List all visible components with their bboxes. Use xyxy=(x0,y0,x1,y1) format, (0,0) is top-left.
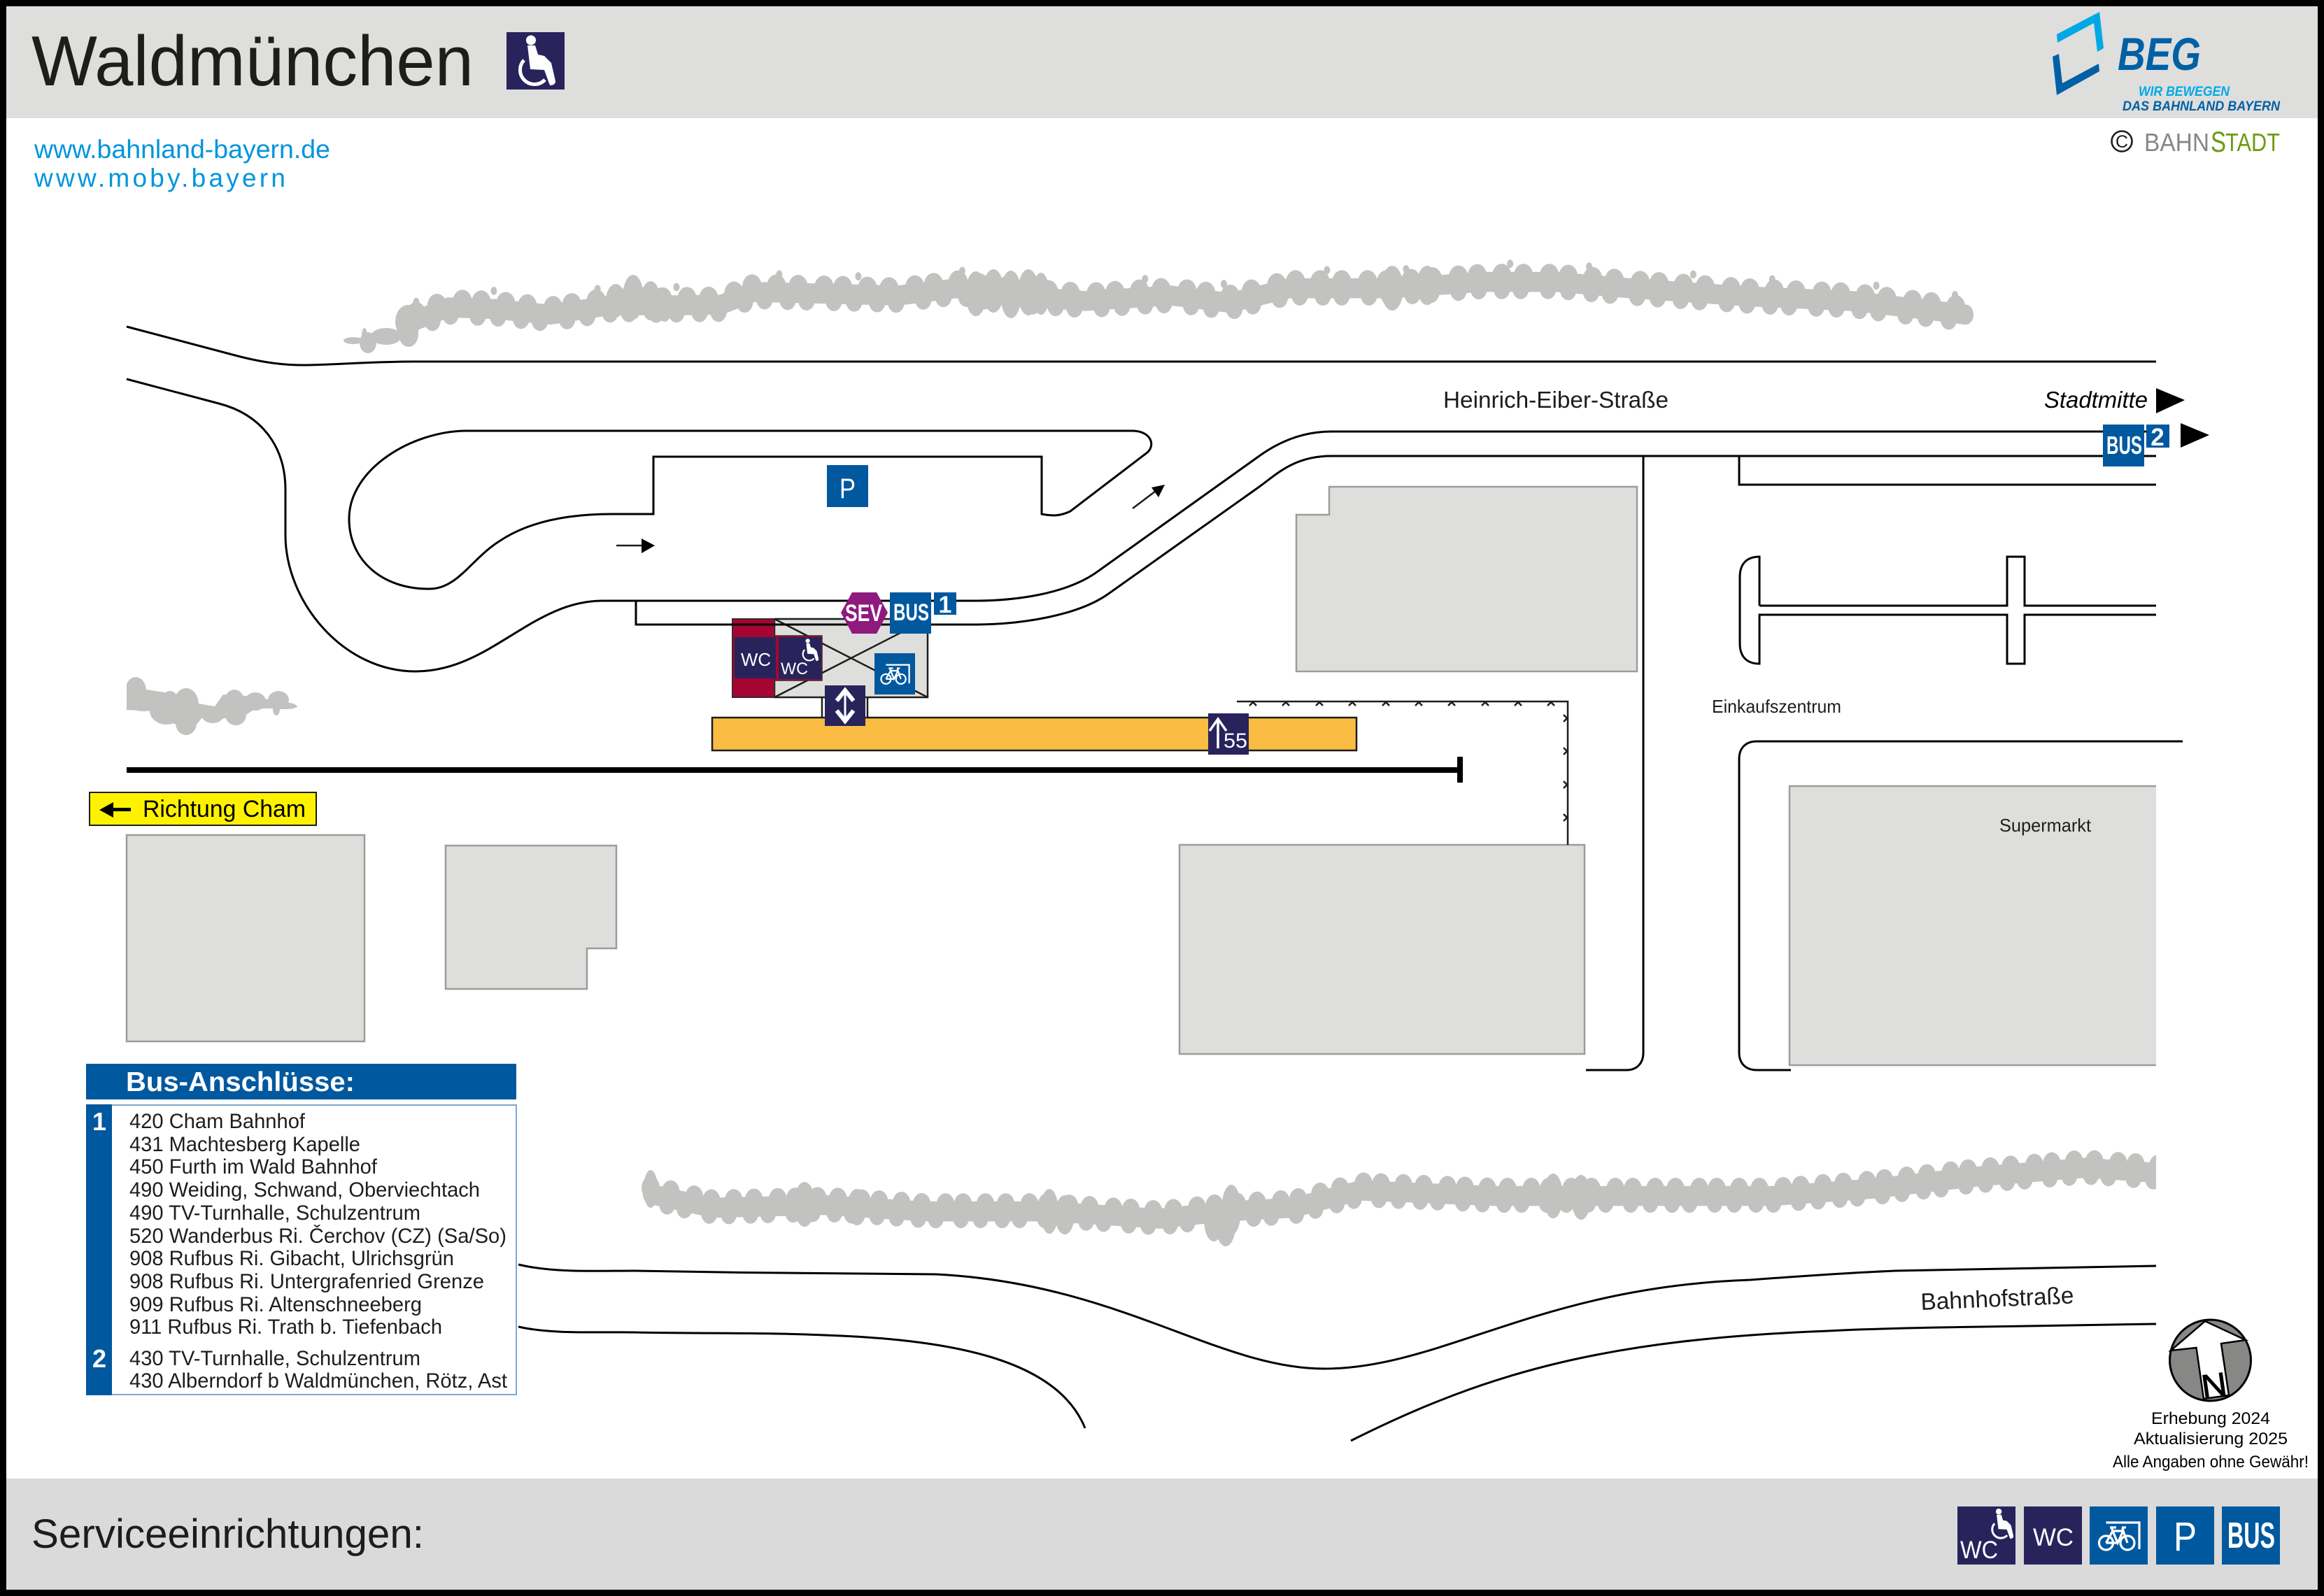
icon: parking: P xyxy=(839,473,856,504)
web links: www.moby.bayern xyxy=(34,164,285,192)
platform xyxy=(712,718,1356,750)
icon: SEV stop xyxy=(841,592,888,634)
route list: 490 TV-Turnhalle, Schulzentrum xyxy=(129,1202,420,1225)
route list: 908 Rufbus Ri. Gibacht, Ulrichsgrün xyxy=(129,1247,454,1270)
arrow: car park entry xyxy=(616,539,655,553)
icon: level access xyxy=(825,685,865,726)
copyright BahnStadt: TADT xyxy=(2225,128,2280,157)
table box xyxy=(87,1105,516,1395)
icon: accessible WC: WC xyxy=(781,660,808,678)
BEG logo xyxy=(2053,12,2281,114)
icon: WC legend: WC xyxy=(2033,1524,2074,1551)
header band xyxy=(6,6,2318,118)
route list: 430 TV-Turnhalle, Schulzentrum xyxy=(129,1347,420,1370)
label: Stadtmitte direction: Stadtmitte xyxy=(2044,387,2148,413)
icon: bus stop 2: 2 xyxy=(2151,424,2164,451)
icon: platform height 55 xyxy=(1208,713,1249,755)
BEG logo: DAS BAHNLAND BAYERN xyxy=(2123,99,2281,114)
survey note: Aktualisierung 2025 xyxy=(2134,1430,2288,1448)
route list: 490 Weiding, Schwand, Oberviechtach xyxy=(129,1178,480,1202)
platform access stem xyxy=(822,697,867,718)
icon: accessible WC legend xyxy=(1957,1506,2015,1565)
icon: north arrow xyxy=(2170,1320,2251,1404)
route list xyxy=(129,1110,508,1392)
web links: www.bahnland-bayern.de xyxy=(34,135,330,164)
panel: bus connections xyxy=(86,1064,516,1395)
route list: 520 Wanderbus Ri. Čerchov (CZ) (Sa/So) xyxy=(129,1224,506,1248)
survey note: Erhebung 2024 xyxy=(2151,1409,2270,1428)
copyright BahnStadt: BAHN xyxy=(2144,128,2209,157)
icon: parking xyxy=(827,465,868,507)
label: Bahnhofstraße: Bahnhofstraße xyxy=(1920,1282,2074,1316)
direction sign: Richtung Cham xyxy=(90,792,316,825)
heading: Bus-Anschlüsse: xyxy=(126,1067,355,1097)
title: Waldmünchen xyxy=(31,22,474,101)
route list: 909 Rufbus Ri. Altenschneeberg xyxy=(129,1293,422,1316)
arrow: bus direction xyxy=(2181,423,2209,448)
icon: north arrow: N xyxy=(2199,1365,2229,1404)
label: Einkaufszentrum: Einkaufszentrum xyxy=(1712,696,1841,717)
arrow: car park exit xyxy=(1133,485,1165,508)
icon: WC legend xyxy=(2024,1506,2082,1565)
vegetation: west xyxy=(125,677,297,735)
icon: bus stop 1 xyxy=(890,592,956,634)
icon: bus legend: BUS xyxy=(2227,1516,2275,1556)
footer band xyxy=(6,1479,2318,1590)
footer heading: Serviceeinrichtungen: xyxy=(31,1511,424,1557)
route list: 450 Furth im Wald Bahnhof xyxy=(129,1155,378,1178)
web links xyxy=(34,135,330,192)
buildings xyxy=(127,487,2156,1065)
BEG logo: WIR BEWEGEN xyxy=(2139,84,2230,99)
icon: platform height 55: 55 xyxy=(1224,729,1247,753)
route list: 908 Rufbus Ri. Untergrafenried Grenze xyxy=(129,1270,484,1293)
direction sign: Richtung Cham: Richtung Cham xyxy=(143,796,306,822)
label: Heinrich-Eiber-Straße: Heinrich-Eiber-Straße xyxy=(1443,387,1668,413)
copyright BahnStadt xyxy=(2111,125,2280,158)
survey note: Alle Angaben ohne Gewähr! xyxy=(2113,1453,2309,1472)
label: Supermarkt: Supermarkt xyxy=(1999,815,2092,836)
BEG logo: BEG xyxy=(2118,28,2201,80)
copyright BahnStadt: S xyxy=(2211,125,2226,158)
icon: parking legend xyxy=(2156,1506,2214,1565)
icon: WC xyxy=(735,637,776,678)
vegetation: north xyxy=(343,264,1966,353)
route list: 420 Cham Bahnhof xyxy=(129,1110,306,1133)
stop number column: 2 xyxy=(92,1344,106,1373)
icon: WC: WC xyxy=(741,649,771,670)
icon: bus stop 1: 1 xyxy=(939,592,951,618)
icon: accessible WC xyxy=(779,637,821,679)
icon: bus stop 2 xyxy=(2103,424,2169,466)
icon: SEV stop: SEV xyxy=(845,600,882,627)
stop number column xyxy=(86,1104,112,1395)
vegetation: south xyxy=(644,1162,2162,1246)
survey note xyxy=(2113,1409,2309,1472)
route list: 430 Alberndorf b Waldmünchen, Rötz, Ast xyxy=(129,1369,508,1392)
icon: bus stop 2: BUS xyxy=(2106,431,2142,459)
icon: bike shelter xyxy=(874,653,915,694)
route list: 431 Machtesberg Kapelle xyxy=(129,1133,360,1156)
icon: accessible WC legend: WC xyxy=(1960,1537,1998,1564)
railway fence xyxy=(1237,701,1568,845)
stop number column: 1 xyxy=(92,1107,106,1136)
icon: parking legend: P xyxy=(2174,1514,2197,1560)
road network xyxy=(127,327,2183,1441)
icon: bike shelter legend xyxy=(2090,1506,2148,1565)
track xyxy=(127,757,1463,783)
icon: bus legend xyxy=(2222,1506,2280,1565)
icon: step-free access xyxy=(506,32,565,90)
icon: bus stop 1: BUS xyxy=(893,599,929,626)
copyright BahnStadt: C xyxy=(2116,132,2128,152)
station building xyxy=(728,619,975,697)
route list: 911 Rufbus Ri. Trath b. Tiefenbach xyxy=(129,1316,442,1339)
heading xyxy=(86,1064,516,1099)
